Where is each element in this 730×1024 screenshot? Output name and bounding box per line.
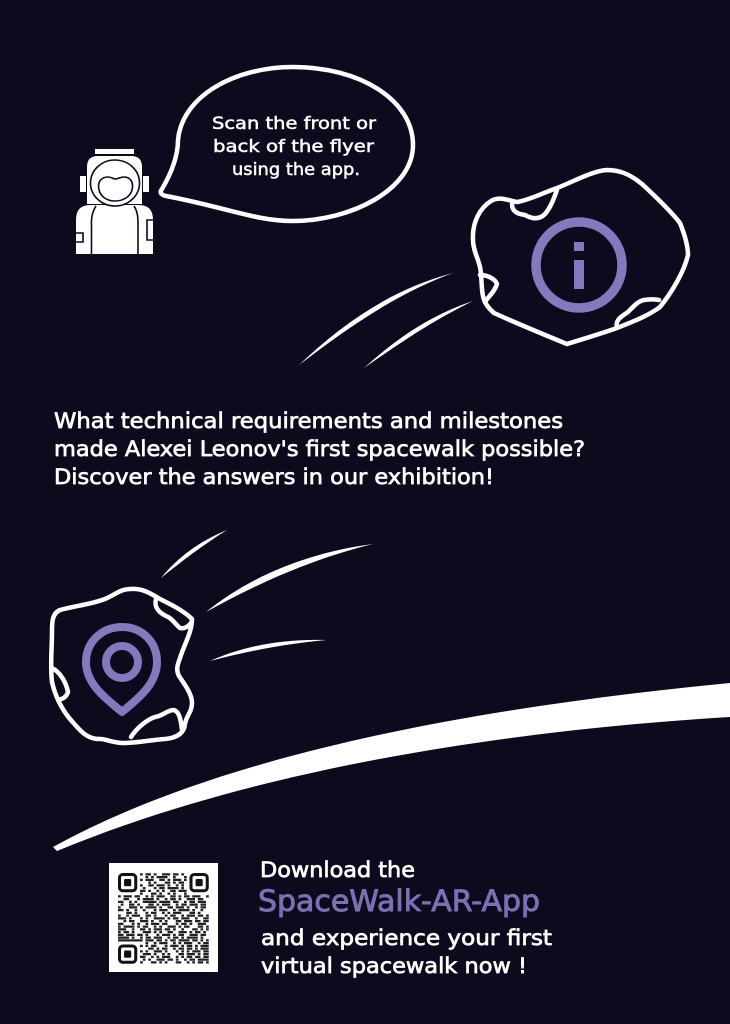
asteroid with info icon bbox=[473, 170, 688, 344]
body text: question bbox=[54, 409, 585, 489]
asteroid with location pin bbox=[51, 589, 192, 743]
heading: app name: SpaceWalk-AR-App bbox=[258, 884, 540, 918]
bubble text: back of the flyer bbox=[213, 137, 374, 157]
bubble text: using the app. bbox=[232, 160, 360, 180]
icon: astronaut bbox=[76, 149, 153, 254]
body text: question: made Alexei Leonov's first spacewalk possible? bbox=[54, 437, 585, 461]
speed lines: upper asteroid bbox=[299, 273, 473, 368]
bubble text bbox=[212, 114, 376, 180]
speed lines: lower asteroid bbox=[161, 530, 373, 661]
download call to action bbox=[258, 858, 552, 978]
swoosh bbox=[53, 683, 730, 851]
icon: info bbox=[536, 222, 622, 308]
asteroid outline bbox=[473, 170, 688, 344]
speech bubble bbox=[161, 67, 413, 221]
bubble text: Scan the front or bbox=[212, 114, 376, 134]
body text: question: What technical requirements and milestones bbox=[54, 409, 563, 433]
QR modules bbox=[118, 873, 209, 964]
text: first line: and experience your first bbox=[261, 926, 552, 950]
text: second line: virtual spacewalk now ! bbox=[261, 954, 527, 978]
QR finder patterns bbox=[118, 873, 209, 964]
heading: download: Download the bbox=[260, 858, 415, 882]
QR code bbox=[109, 863, 218, 972]
asteroid outline bbox=[51, 589, 192, 743]
body text: question: Discover the answers in our exhibition! bbox=[54, 465, 494, 489]
icon: location pin bbox=[86, 627, 157, 712]
